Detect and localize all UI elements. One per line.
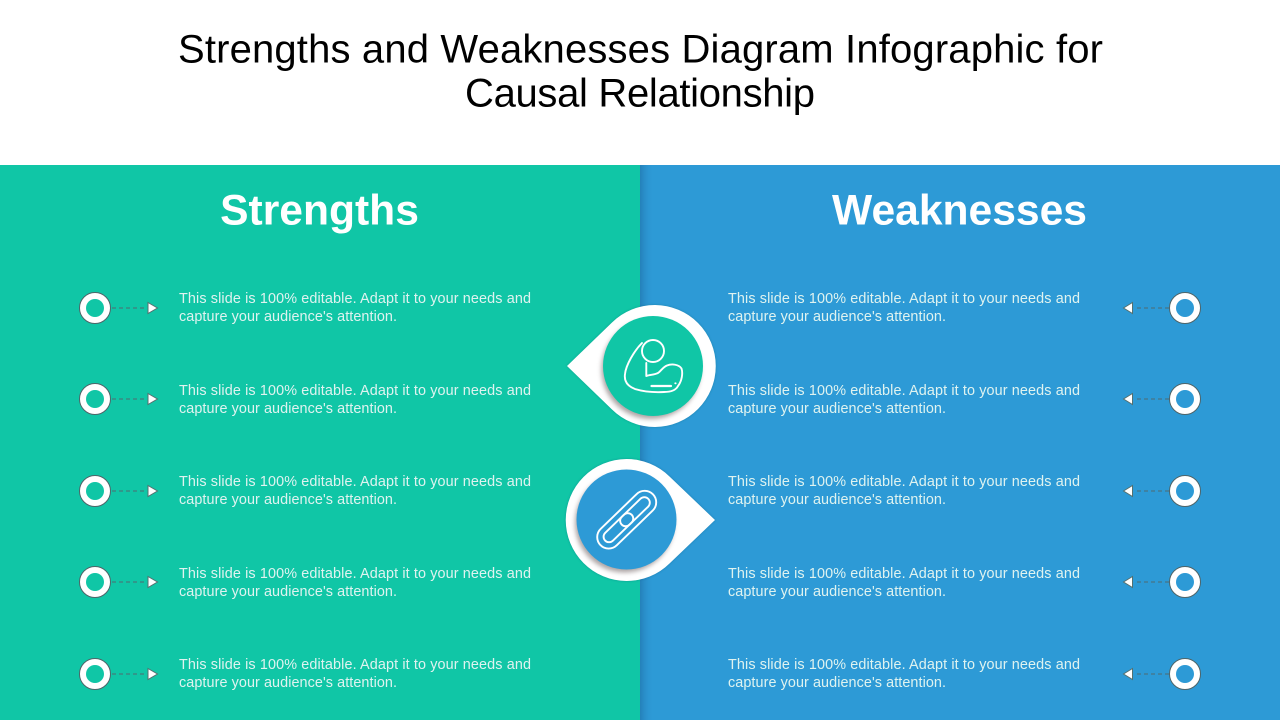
item 4: capture your audience's attention. bbox=[179, 584, 397, 600]
strengths pin bbox=[567, 305, 716, 427]
item 1: This slide is 100% editable. Adapt it to your needs and bbox=[728, 291, 1080, 307]
item 2 bbox=[728, 383, 1200, 417]
item 5: This slide is 100% editable. Adapt it to your needs and bbox=[728, 657, 1080, 673]
item 4 bbox=[728, 566, 1200, 600]
item 1: This slide is 100% editable. Adapt it to your needs and bbox=[179, 291, 531, 307]
item 5: This slide is 100% editable. Adapt it to your needs and bbox=[179, 657, 531, 673]
title: Strengths and Weaknesses Diagram Infographic for bbox=[178, 28, 1103, 72]
item 5 bbox=[80, 657, 531, 691]
title: Causal Relationship bbox=[465, 72, 815, 116]
item 5 bbox=[728, 657, 1200, 691]
item 3 bbox=[728, 474, 1200, 508]
item 4 bbox=[80, 566, 531, 600]
item 4: This slide is 100% editable. Adapt it to your needs and bbox=[728, 566, 1080, 582]
icon: flexed arm bbox=[625, 340, 682, 392]
item 5: capture your audience's attention. bbox=[179, 675, 397, 691]
title bbox=[178, 28, 1103, 116]
item 2: This slide is 100% editable. Adapt it to your needs and bbox=[179, 383, 531, 399]
item 1 bbox=[80, 291, 531, 325]
heading: strengths: Strengths bbox=[220, 186, 419, 234]
item 4: capture your audience's attention. bbox=[728, 584, 946, 600]
item 2: capture your audience's attention. bbox=[728, 401, 946, 417]
item 3: This slide is 100% editable. Adapt it to your needs and bbox=[179, 474, 531, 490]
weaknesses pin bbox=[566, 459, 715, 581]
item 2: This slide is 100% editable. Adapt it to your needs and bbox=[728, 383, 1080, 399]
panel: weaknesses bbox=[640, 165, 1280, 720]
icon: chain link bbox=[592, 486, 661, 553]
item 5: capture your audience's attention. bbox=[728, 675, 946, 691]
item 3 bbox=[80, 474, 531, 508]
item 4: This slide is 100% editable. Adapt it to your needs and bbox=[179, 566, 531, 582]
item 1 bbox=[728, 291, 1200, 325]
item 3: capture your audience's attention. bbox=[179, 492, 397, 508]
item 1: capture your audience's attention. bbox=[728, 309, 946, 325]
strengths list bbox=[80, 291, 531, 691]
item 2: capture your audience's attention. bbox=[179, 401, 397, 417]
item 1: capture your audience's attention. bbox=[179, 309, 397, 325]
heading: weaknesses: Weaknesses bbox=[832, 186, 1087, 234]
item 2 bbox=[80, 383, 531, 417]
item 3: This slide is 100% editable. Adapt it to your needs and bbox=[728, 474, 1080, 490]
weaknesses list bbox=[728, 291, 1200, 691]
item 3: capture your audience's attention. bbox=[728, 492, 946, 508]
